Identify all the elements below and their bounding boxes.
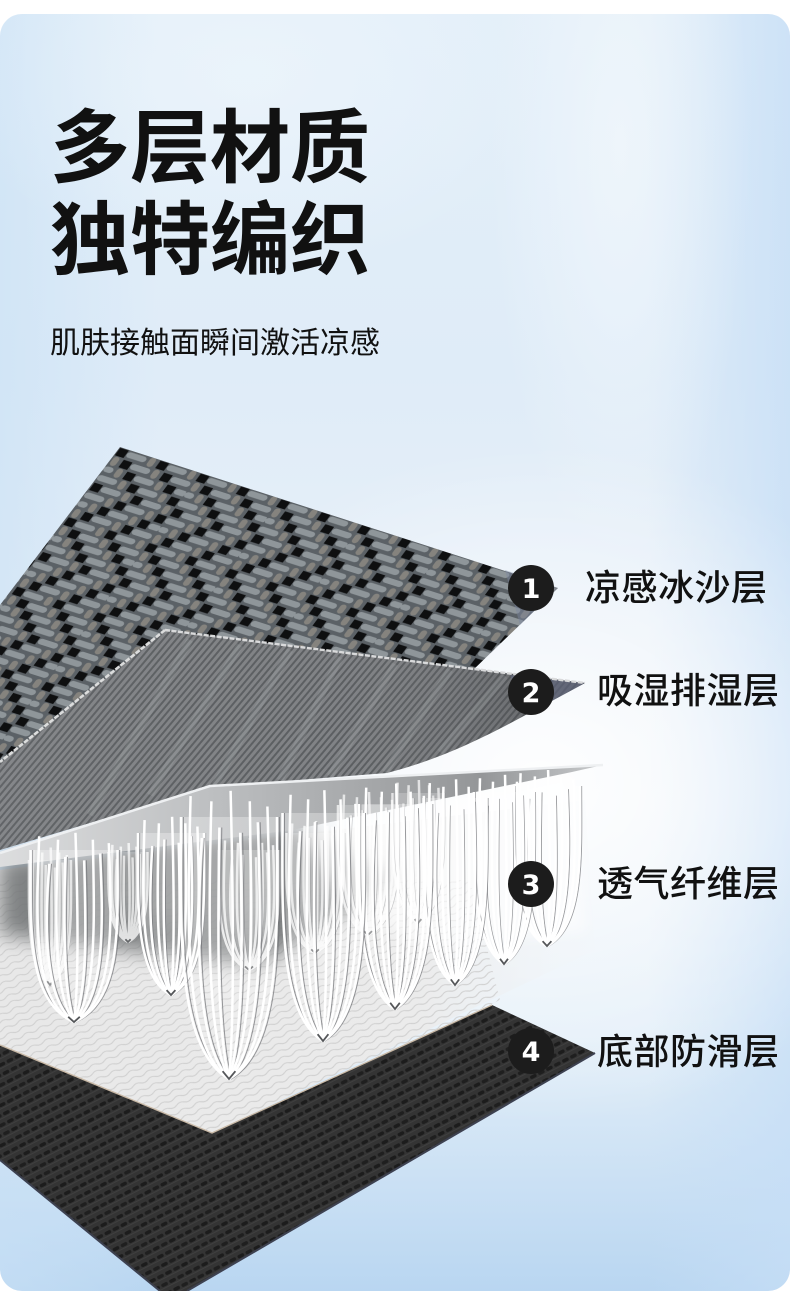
layer 3: upper sheet underside [0,765,603,867]
subtitle: 肌肤接触面瞬间激活凉感 [50,327,380,360]
label 4: 底部防滑层 [597,1031,780,1072]
marker 2: 2 [522,678,540,709]
marker 4 [508,1028,554,1074]
title [50,104,370,285]
marker 2 [508,669,554,715]
marker 1 [508,565,554,611]
layer 3: breathable fibre bundles [29,770,582,1079]
label 1: 凉感冰沙层 [585,567,768,608]
layer 2: moisture-wicking sheet [0,630,585,850]
label 2: 吸湿排湿层 [597,670,780,711]
label 3: 透气纤维层 [597,863,780,904]
layer 3: base fabric sheet [0,824,500,1134]
layer 1: cooling ice-sand weave [0,447,558,800]
marker 1: 1 [522,574,540,605]
illustration: four material layers [0,447,603,1291]
layer 4: bottom anti-slip base [0,1005,595,1291]
marker 3 [508,861,554,907]
marker 4: 4 [522,1037,540,1068]
title: 独特编织 [50,196,370,285]
marker 3: 3 [522,870,540,901]
title: 多层材质 [50,104,370,193]
